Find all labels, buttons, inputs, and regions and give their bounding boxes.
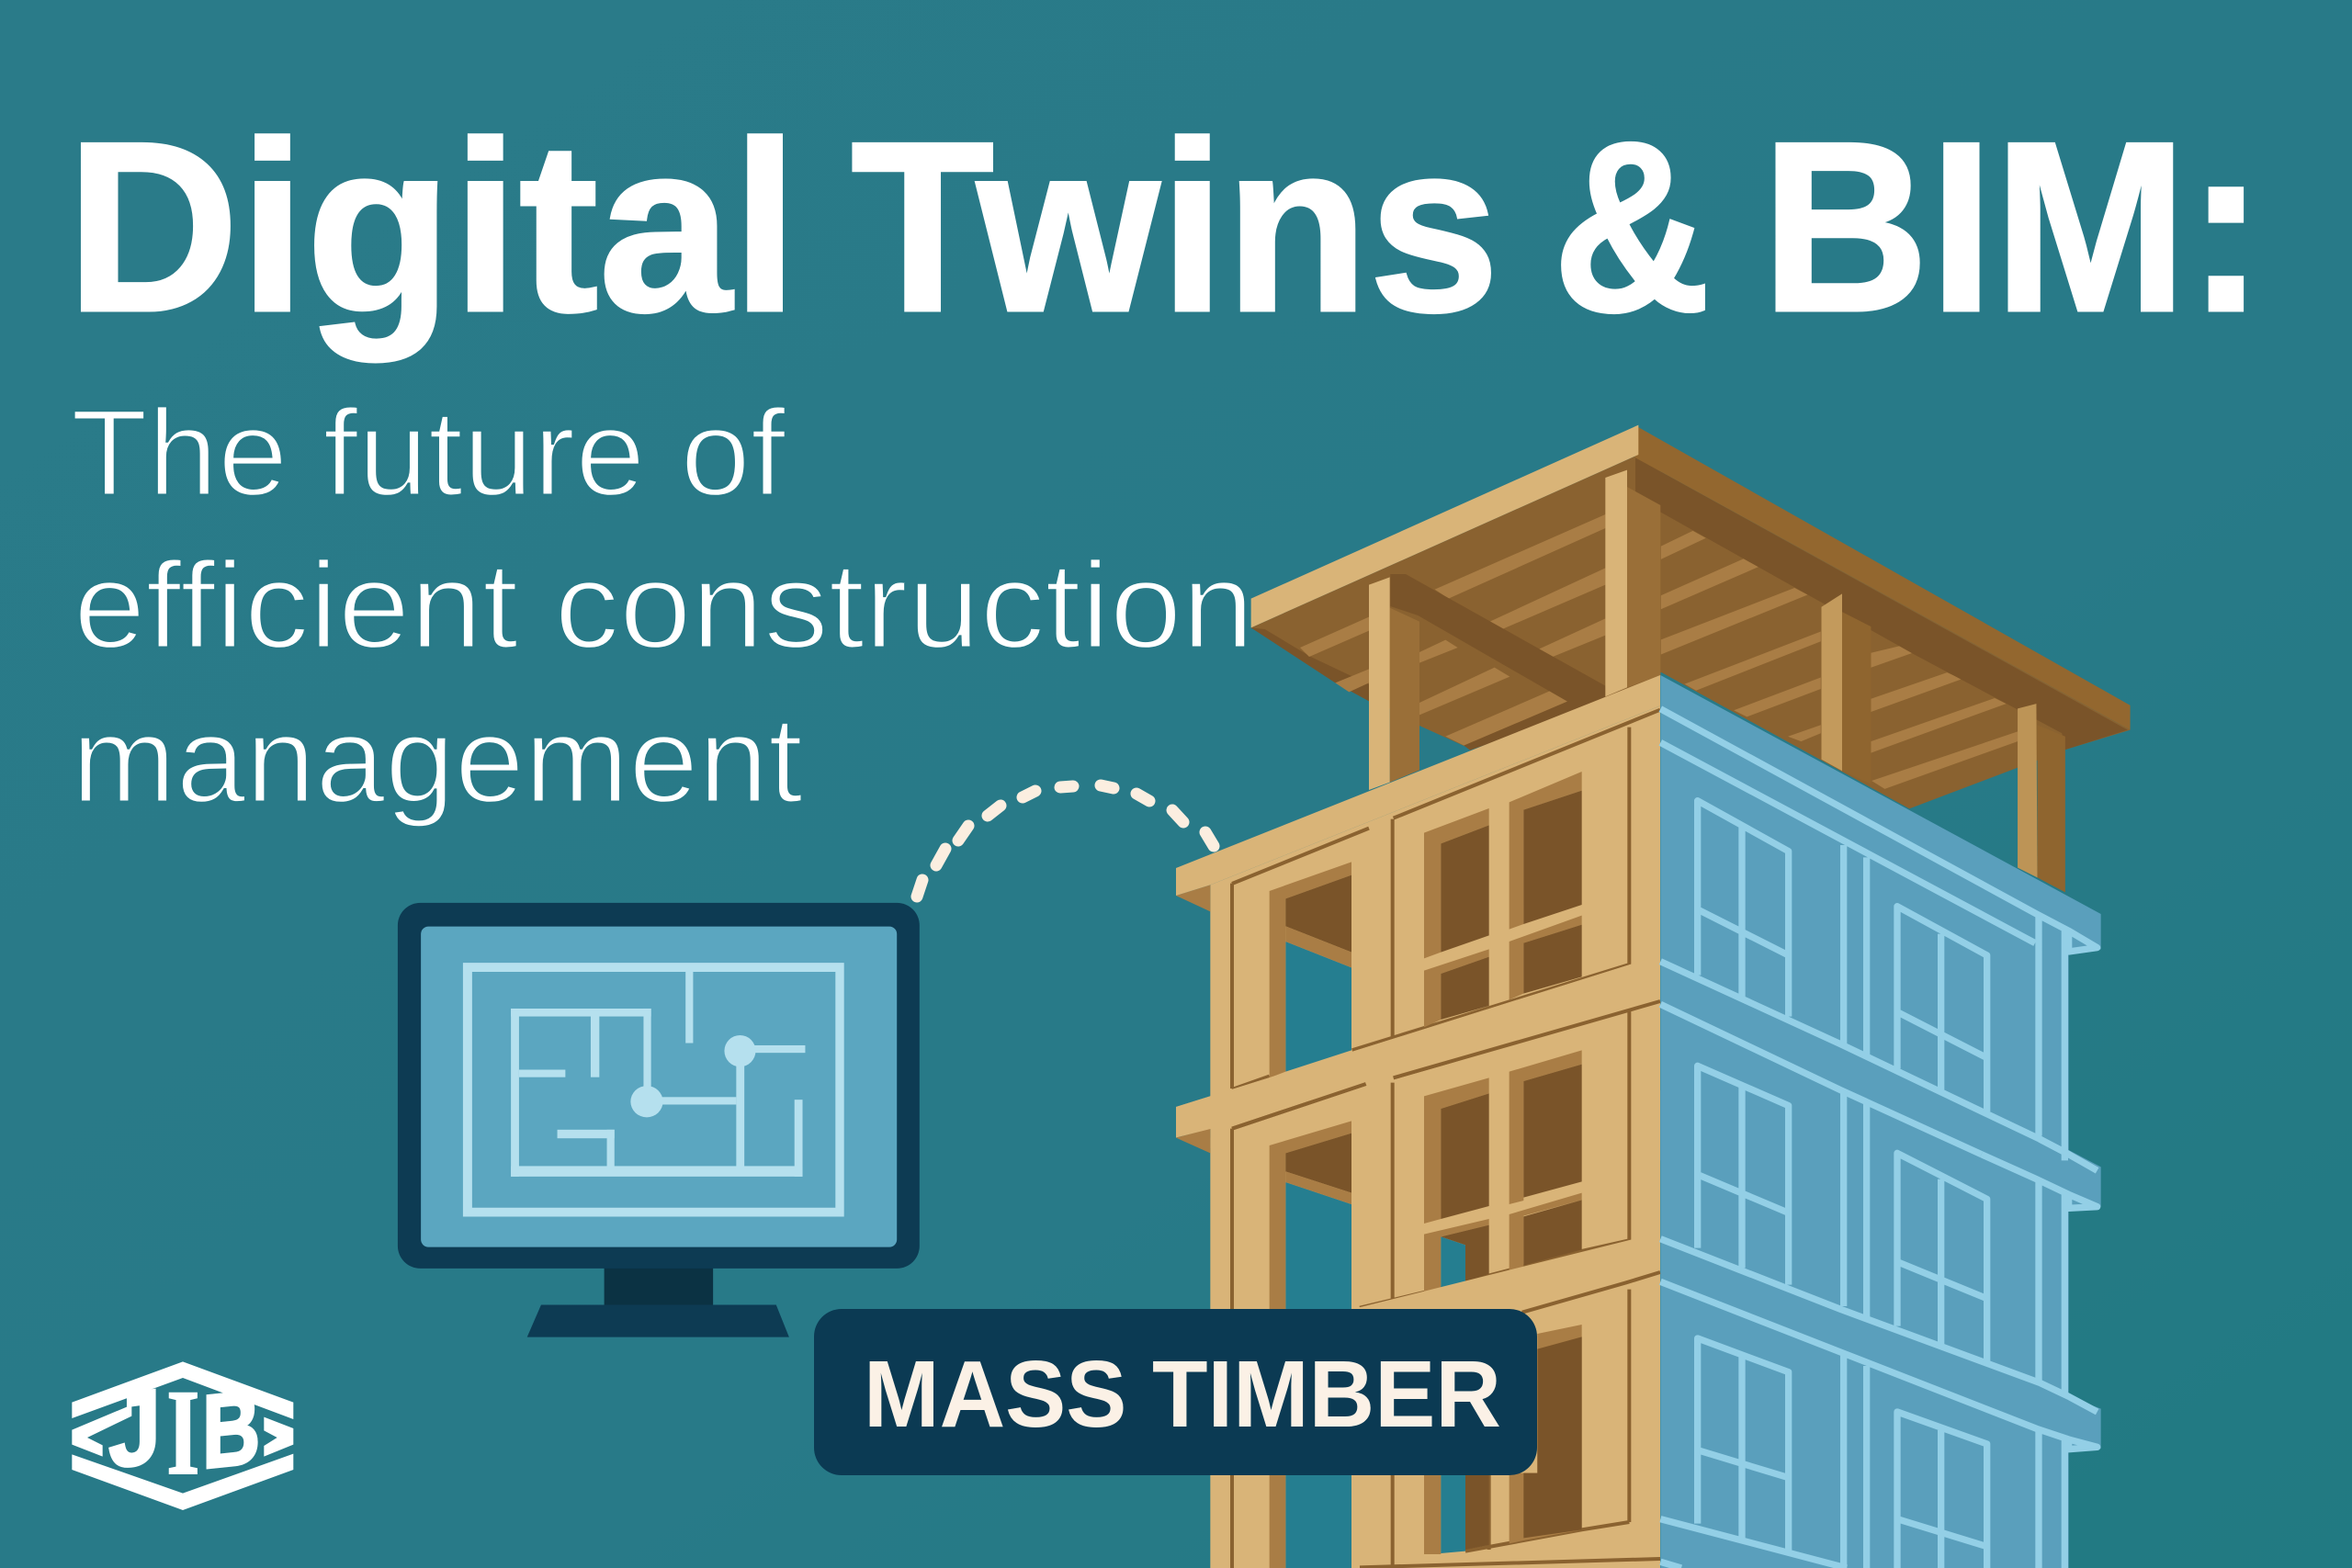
icon: computer monitor with floor plan: [398, 903, 920, 1337]
timber wall, upper floors: [1176, 675, 1660, 1148]
building illustration: [1176, 425, 2131, 1568]
subtitle: The future of: [71, 385, 786, 522]
subtitle: [71, 385, 1254, 829]
blue BIM facade surface: [1660, 675, 2101, 1568]
subtitle: management: [72, 692, 803, 829]
roof underside, left part: [1251, 455, 1660, 750]
monitor stand: [527, 1267, 789, 1337]
monitor screen: [421, 927, 897, 1247]
monitor frame: [398, 903, 920, 1269]
title: &: [1553, 91, 1711, 362]
facade outlines, floor 1: [1660, 709, 2098, 1160]
timber wall, lower floors: [1176, 955, 1660, 1568]
subtitle: efficient construction: [74, 537, 1254, 674]
floor plan drawing: [463, 963, 844, 1217]
title: Digital: [66, 91, 798, 364]
logo: JIB: I: [166, 1364, 199, 1500]
roof, right part: [1635, 426, 2131, 892]
title: Twins: [851, 91, 1499, 362]
mass timber label: [814, 1309, 1537, 1475]
logo: JIB: B: [202, 1369, 260, 1491]
dashed connector arc from monitor to building: [917, 785, 1214, 897]
title: BIM:: [1761, 91, 2265, 362]
mass timber label: MASS TIMBER: [864, 1341, 1501, 1447]
facade outlines, floors 2 and 3: [1660, 1066, 2098, 1568]
logo: JIB: [72, 1361, 293, 1510]
logo: JIB: J: [108, 1368, 161, 1491]
roof front beam and left columns: [1251, 425, 1660, 790]
title: [66, 91, 2265, 364]
